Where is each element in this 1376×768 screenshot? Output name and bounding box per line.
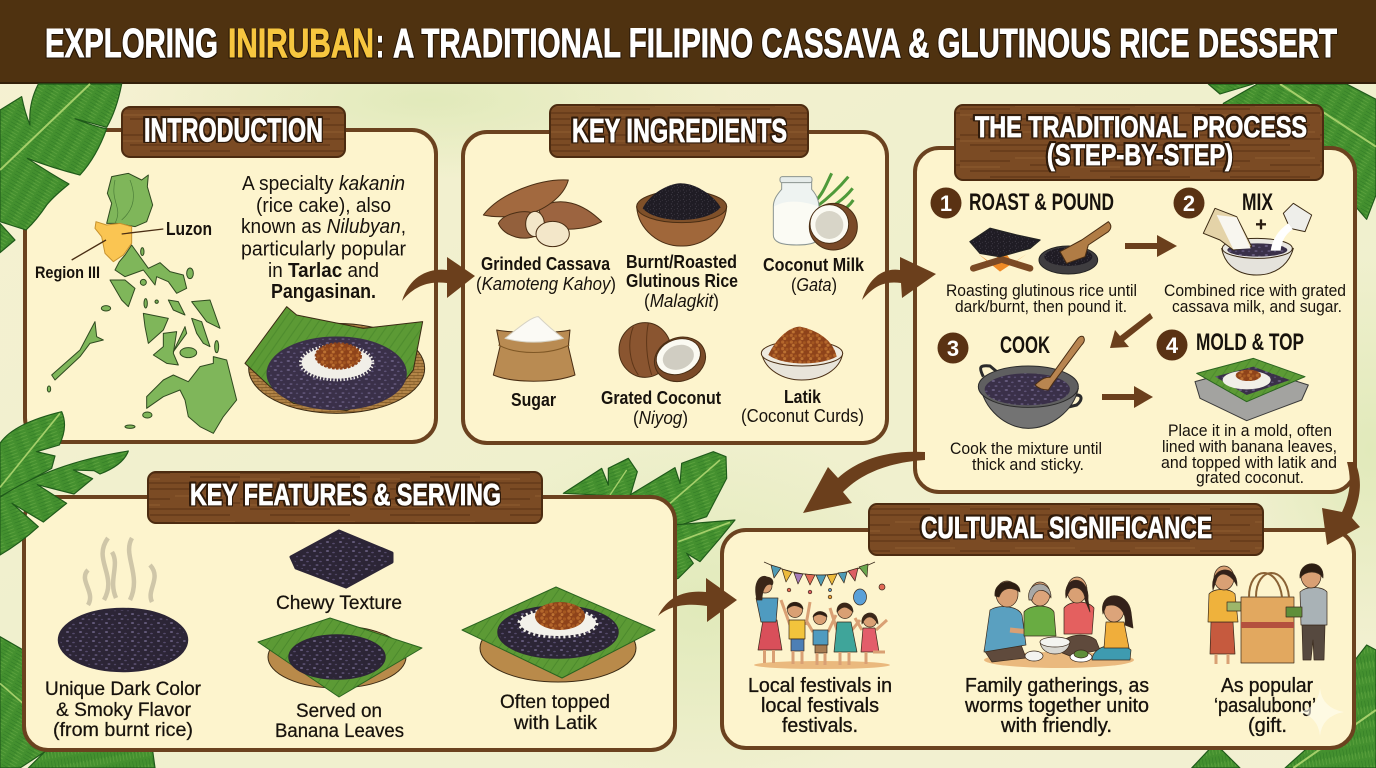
step 1 text: Roasting glutinous rice until: [946, 282, 1137, 300]
title: EXPLORING: [45, 20, 218, 66]
label: chewy texture: Chewy Texture: [276, 592, 402, 614]
badge 1: [930, 188, 962, 218]
heading plaque: traditional process: (STEP-BY-STEP): [1047, 139, 1233, 172]
panel: key features and serving: [24, 472, 675, 750]
heading plaque: introduction: [122, 107, 345, 157]
heading plaque: key features: [148, 472, 542, 523]
step 3: [938, 332, 1102, 474]
badge 4: [1156, 330, 1188, 360]
label: family gatherings: Family gatherings, as: [965, 675, 1149, 697]
illustration: pasalubong gift: [1208, 564, 1327, 664]
father: [984, 581, 1030, 662]
arrow: ingredients to process: [862, 257, 936, 300]
panel: introduction: [25, 107, 436, 442]
introduction text: [241, 173, 406, 303]
step 2 text: [1164, 282, 1346, 316]
heading plaque: key ingredients: KEY INGREDIENTS: [572, 112, 787, 149]
heading plaque: traditional process: [955, 105, 1323, 180]
step 1 text: [946, 282, 1137, 316]
grandmother: [1024, 582, 1056, 636]
icon: roasting and pounding: [970, 222, 1111, 274]
arrow: step 3 to step 4: [1102, 386, 1153, 408]
woman: [1208, 566, 1241, 664]
label: family gatherings: with friendly.: [1000, 715, 1112, 737]
step 4 text: [1161, 422, 1337, 487]
icon: burnt rice bowl: [637, 183, 727, 246]
introduction text: particularly popular: [241, 238, 406, 260]
label: local festivals: festivals.: [782, 715, 858, 737]
banana leaves: bottom left: [0, 637, 155, 768]
introduction text: Pangasinan.: [271, 281, 376, 303]
step 2: [1164, 188, 1346, 316]
label: served on banana leaves: Banana Leaves: [275, 720, 404, 742]
introduction text: A specialty kakanin: [242, 173, 405, 195]
step 2 text: Combined rice with grated: [1164, 282, 1346, 300]
ingredient labels: Sugar: [511, 390, 556, 410]
step 1 title: ROAST & POUND: [969, 189, 1114, 216]
gift bag: [1241, 573, 1294, 663]
icon: steam: [85, 538, 155, 605]
heading plaque: key ingredients: [550, 105, 808, 157]
label: served on banana leaves: [275, 700, 404, 742]
badge 3: [938, 332, 968, 364]
ingredient labels: Grated Coconut: [601, 388, 721, 408]
illustration: family gathering: [984, 577, 1134, 668]
step 1: [930, 188, 1137, 316]
introduction text: known as Nilubyan,: [241, 216, 406, 238]
heading plaque: key features: KEY FEATURES & SERVING: [190, 477, 501, 512]
ingredient labels: (Niyog): [633, 408, 688, 428]
heading plaque: cultural significance: [869, 504, 1263, 555]
step 4 text: grated coconut.: [1196, 469, 1304, 487]
ingredient labels: (Coconut Curds): [741, 406, 864, 426]
step 3 text: thick and sticky.: [972, 456, 1084, 474]
introduction text: (rice cake), also: [256, 195, 391, 217]
icon: cassava: [483, 180, 602, 247]
label: pasalubong: ‘pasalubong’: [1214, 695, 1316, 717]
label: served on banana leaves: Served on: [296, 700, 382, 722]
heading plaque: introduction: INTRODUCTION: [144, 112, 323, 148]
header bar: [0, 0, 1376, 84]
step 3 title: COOK: [1000, 332, 1050, 359]
step 4 text: and topped with latik and: [1161, 454, 1337, 472]
label: pasalubong: [1214, 675, 1316, 737]
arrow: introduction to ingredients: [402, 257, 475, 301]
icon: coconut milk: [773, 173, 857, 250]
banana leaves: centre: [563, 452, 735, 580]
label: pasalubong: (gift.: [1248, 715, 1287, 737]
title: :: [376, 20, 384, 66]
label: pasalubong: As popular: [1221, 675, 1313, 697]
banana leaf: top left, over the introduction panel: [0, 84, 122, 253]
banana leaves: bottom right: [1192, 645, 1376, 768]
ingredient labels: (Gata): [791, 275, 837, 295]
bunting: [764, 562, 875, 586]
label: dark color: Unique Dark Color: [45, 678, 201, 700]
ingredient labels: (Kamoteng Kahoy): [476, 274, 616, 294]
sparkle: [1298, 688, 1344, 736]
badge 2: 2: [1183, 191, 1195, 216]
child 4: [855, 613, 887, 664]
step 4: [1156, 329, 1337, 487]
child 1: [781, 600, 810, 664]
badge 4: 4: [1166, 333, 1179, 358]
arrow: process to cultural significance: [1322, 462, 1360, 545]
map of the Philippines: [47, 173, 237, 433]
panel: key ingredients: [463, 105, 887, 443]
label: family gatherings: worms together unito: [964, 695, 1149, 717]
step 3 text: Cook the mixture until: [950, 440, 1102, 458]
label: dark color: [45, 678, 201, 741]
step 2 text: cassava milk, and sugar.: [1172, 298, 1342, 316]
introduction text: in Tarlac and: [268, 260, 379, 282]
icon: cooking pot: [978, 336, 1084, 428]
arrow: key features to cultural significance: [658, 578, 737, 622]
child 2: [806, 612, 836, 665]
label: often topped: Often topped: [500, 691, 610, 713]
icon: mixing bowl: [1203, 203, 1312, 275]
map label: Luzon: Luzon: [166, 219, 212, 239]
bowl and plates: [1025, 637, 1092, 662]
label: local festivals: local festivals: [761, 695, 879, 717]
ingredient labels: [476, 252, 865, 428]
badge 1: 1: [940, 191, 952, 216]
step 4 text: Place it in a mold, often: [1168, 422, 1332, 440]
ingredient labels: Grinded Cassava: [481, 254, 611, 274]
arrow: step 2 to step 3: [1110, 313, 1153, 348]
mother: [1060, 577, 1100, 656]
step 4 text: lined with banana leaves,: [1162, 438, 1337, 456]
icon: grated coconut: [619, 323, 712, 389]
step 2 title: MIX: [1242, 189, 1273, 216]
panel: traditional process: [915, 105, 1355, 492]
ingredient labels: Latik: [784, 387, 822, 407]
icon: sugar sack: [493, 317, 575, 381]
label: often topped: [500, 691, 610, 734]
banana leaf: top right: [1208, 84, 1376, 219]
illustration: local festival: [754, 562, 890, 669]
illustration: iniruban on basket: [245, 307, 425, 413]
label: local festivals: Local festivals in: [748, 675, 892, 697]
panel: cultural significance: [722, 504, 1354, 748]
mother: [756, 576, 782, 663]
map label: Region III: Region III: [35, 264, 100, 282]
step 3 text: [950, 440, 1102, 474]
ingredient labels: Coconut Milk: [763, 255, 865, 275]
label: family gatherings: [964, 675, 1149, 737]
step 4 title: MOLD & TOP: [1196, 329, 1304, 356]
step 1 text: dark/burnt, then pound it.: [955, 298, 1127, 316]
ingredient labels: Burnt/Roasted: [626, 252, 737, 272]
title: INIRUBAN: [228, 20, 374, 66]
arrow: step 1 to step 2: [1125, 235, 1177, 257]
badge 2: [1174, 188, 1204, 218]
label: local festivals: [748, 675, 892, 737]
badge 3: 3: [947, 336, 959, 361]
label: often topped: with Latik: [513, 712, 597, 734]
label: dark color: (from burnt rice): [53, 719, 193, 741]
icon: dark rice cake: [59, 609, 187, 671]
ingredient labels: Glutinous Rice: [626, 271, 738, 291]
banana leaves: left, over the panels: [0, 412, 128, 555]
heading plaque: cultural significance: CULTURAL SIGNIFICANCE: [921, 510, 1212, 545]
child 3: [830, 603, 860, 665]
icon: cake topped with latik: [462, 587, 655, 682]
icon: chewy square: [291, 531, 392, 587]
icon: cake on banana leaf: [258, 618, 422, 697]
label: dark color: & Smoky Flavor: [56, 699, 191, 721]
icon: latik bowl: [761, 327, 843, 380]
man: [1286, 564, 1327, 660]
arrow: process to key features: [803, 452, 925, 513]
ingredient icons: [483, 173, 857, 389]
ingredient labels: (Malagkit): [644, 291, 719, 311]
highlighted Region III: [95, 222, 132, 262]
icon: mold with banana leaf: [1195, 358, 1308, 421]
girl: [1092, 596, 1133, 660]
